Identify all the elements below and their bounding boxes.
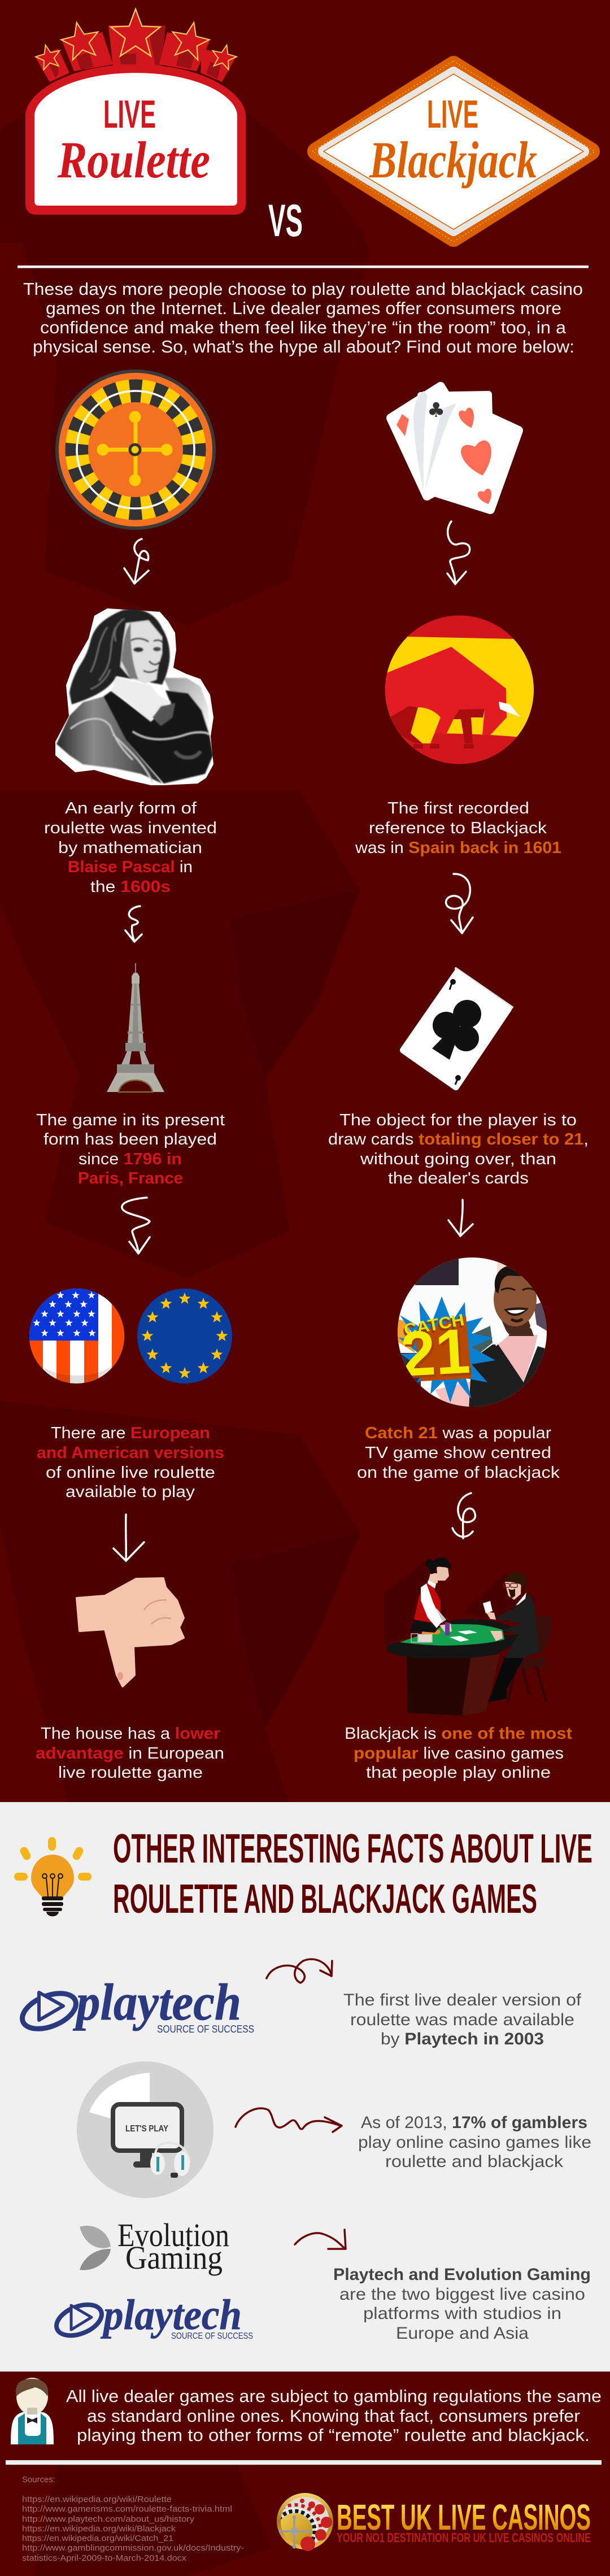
text: early roulette: An early form of xyxy=(65,799,197,817)
text: object of game xyxy=(328,1111,589,1187)
arrow: spain to card xyxy=(446,874,473,933)
text: paris: The game in its present xyxy=(36,1111,225,1129)
text: first reference: The first recorded xyxy=(387,799,529,817)
text: versions: There are European xyxy=(51,1424,210,1442)
text: most popular xyxy=(345,1725,572,1782)
text: paris xyxy=(36,1111,225,1187)
sign stars xyxy=(33,9,239,71)
text: most popular: Blackjack is one of the most xyxy=(345,1725,572,1743)
sources list: http://www.playtech.com/about_us/history xyxy=(22,2514,195,2524)
icon: light bulb xyxy=(14,1837,91,1916)
face xyxy=(494,1272,537,1326)
heading xyxy=(113,1826,592,1922)
intro text: physical sense. So, what’s the hype all about? Find out more below: xyxy=(33,337,574,356)
logo: playtech xyxy=(18,1973,254,2036)
blackjack sign title: LIVE xyxy=(427,92,478,136)
text: regulations xyxy=(66,2386,602,2445)
panel: live blackjack sign: Blackjack xyxy=(369,131,537,189)
arrow: versions to thumb xyxy=(114,1515,144,1561)
text: early roulette: the 1600s xyxy=(90,878,171,896)
icon: gamblers pie and monitor xyxy=(77,2061,213,2198)
logo: playtech second: playtech xyxy=(100,2291,242,2339)
vs label: VS xyxy=(268,195,303,246)
text: biggest platforms: Playtech and Evolution Gaming xyxy=(333,2265,591,2284)
icon: blackjack table xyxy=(384,1557,552,1716)
text: regulations: as standard online ones. Knowing that fact, consumers prefer xyxy=(87,2406,580,2426)
intro text: games on the Internet. Live dealer games offer consumers more xyxy=(46,298,561,318)
left coat xyxy=(56,697,162,784)
photo: catch 21 host: CATCH xyxy=(403,1311,466,1339)
arrow: gamblers fact xyxy=(236,2108,342,2132)
text: playtech 2003: roulette was made available xyxy=(350,2011,574,2029)
logo: playtech second xyxy=(52,2291,253,2342)
sign rays xyxy=(36,25,236,82)
panel: live blackjack sign xyxy=(312,61,595,242)
text: versions: of online live roulette xyxy=(46,1464,215,1482)
text: 17 percent xyxy=(358,2113,591,2171)
sources list: https://en.wikipedia.org/wiki/Roulette xyxy=(22,2495,172,2504)
text: paris: form has been played xyxy=(43,1130,217,1148)
sign title: LIVE xyxy=(103,92,156,136)
text: regulations: playing them to other forms of “remote” roulette and blackjack. xyxy=(77,2425,590,2445)
text: 17 percent: As of 2013, 17% of gamblers xyxy=(361,2113,587,2132)
panel: live roulette sign xyxy=(25,9,246,215)
arrow: platforms fact xyxy=(295,2230,346,2249)
hair xyxy=(69,609,169,704)
text: biggest platforms xyxy=(333,2265,591,2343)
logo: evolution gaming xyxy=(80,2217,229,2276)
icon: club card xyxy=(403,968,512,1087)
text: catch 21: Catch 21 was a popular xyxy=(365,1424,551,1442)
text: object of game: without going over, than xyxy=(360,1150,556,1168)
text: versions: and American versions xyxy=(37,1444,224,1462)
text: biggest platforms: platforms with studios in xyxy=(363,2304,561,2323)
suit jacket xyxy=(472,1326,493,1352)
logo: playtech: SOURCE OF SUCCESS xyxy=(157,2024,254,2035)
logo: playtech: playtech xyxy=(73,1973,241,2031)
text: 17 percent: roulette and blackjack xyxy=(385,2152,564,2171)
dark coat xyxy=(103,690,213,784)
sources list: http://www.gamblingcommission.gov.uk/docs/Industry- xyxy=(22,2543,244,2553)
icon: thumbs down xyxy=(77,1578,184,1686)
sources list: statistics-April-2009-to-March-2014.docx xyxy=(22,2553,187,2563)
text: lower advantage: live roulette game xyxy=(58,1764,203,1782)
collar xyxy=(111,677,171,721)
text: object of game: the dealer's cards xyxy=(388,1169,529,1187)
shirt xyxy=(498,1335,538,1382)
text: paris: since 1796 in xyxy=(79,1150,182,1168)
text: catch 21 xyxy=(357,1424,560,1482)
text: catch 21: on the game of blackjack xyxy=(357,1464,560,1482)
dealer figure xyxy=(411,1557,452,1635)
text: object of game: The object for the player is to xyxy=(339,1111,577,1129)
intro text: These days more people choose to play roulette and blackjack casino xyxy=(23,279,583,299)
sources list: http://www.gamerisms.com/roulette-facts-trivia.html xyxy=(22,2504,232,2514)
text: biggest platforms: Europe and Asia xyxy=(396,2324,529,2343)
text: regulations: All live dealer games are subject to gambling regulations the same xyxy=(66,2386,602,2406)
text: object of game: draw cards totaling closer to 21 , xyxy=(328,1130,589,1148)
logo: best uk live casinos xyxy=(277,2493,591,2551)
text: versions: available to play xyxy=(66,1483,195,1501)
logo: evolution gaming: Gaming xyxy=(125,2239,223,2276)
photo: catch 21 host: 21 xyxy=(402,1318,474,1392)
arrow: paris to flags xyxy=(122,1198,150,1254)
text: biggest platforms: are the two biggest live casino xyxy=(339,2285,585,2304)
text: most popular: that people play online xyxy=(366,1764,551,1782)
text: first reference: reference to Blackjack xyxy=(369,819,547,837)
text: playtech 2003: by Playtech in 2003 xyxy=(381,2030,544,2048)
player figure xyxy=(483,1572,539,1702)
text: first reference: was in Spain back in 1601 xyxy=(355,839,561,857)
text: catch 21: TV game show centred xyxy=(365,1444,551,1462)
text: playtech 2003: The first live dealer version of xyxy=(343,1991,582,2009)
portrait: Blaise Pascal xyxy=(55,608,213,785)
chair xyxy=(507,1615,552,1704)
text: versions xyxy=(37,1424,224,1501)
text: 17 percent: play online casino games like xyxy=(358,2133,591,2152)
text: early roulette: Blaise Pascal in xyxy=(68,858,193,876)
text: early roulette xyxy=(44,799,217,896)
text: paris: Paris, France xyxy=(78,1169,183,1187)
arrow: card to catch 21 xyxy=(448,1200,473,1236)
icon: spanish bull xyxy=(384,615,537,765)
arrow: pascal to eiffel xyxy=(125,906,142,942)
text: most popular: popular live casino games xyxy=(354,1744,564,1763)
face xyxy=(120,620,162,684)
text: lower advantage: The house has a lower xyxy=(41,1725,220,1743)
panel: live roulette sign: Roulette xyxy=(57,131,210,189)
text: lower advantage xyxy=(36,1725,224,1782)
icon: eiffel tower xyxy=(107,963,164,1092)
text: early roulette: by mathematician xyxy=(58,839,202,857)
sources list: Sources: xyxy=(22,2475,55,2484)
sources list: https://en.wikipedia.org/wiki/Blackjack xyxy=(22,2524,176,2534)
icon: playing cards xyxy=(391,386,518,510)
arrow: playtech fact xyxy=(267,1959,332,1983)
logo wheel xyxy=(277,2493,333,2551)
arrow: catch 21 to table xyxy=(452,1493,476,1538)
logo: evolution gaming: Evolution xyxy=(117,2217,229,2253)
icon: gamblers pie and monitor: LET'S PLAY xyxy=(125,2124,168,2134)
icon: playing cards: ♣ xyxy=(427,399,445,422)
sources list xyxy=(22,2475,244,2563)
text: lower advantage: advantage in European xyxy=(36,1744,224,1763)
icon: roulette wheel xyxy=(55,369,216,530)
sources list: https://en.wikipedia.org/wiki/Catch_21 xyxy=(22,2534,173,2543)
icon: american flag xyxy=(29,1288,125,1387)
intro text xyxy=(23,279,583,356)
text: first reference xyxy=(355,799,561,857)
panel: other interesting facts xyxy=(0,1802,610,2372)
intro text: confidence and make them feel like they’re “in the room” too, in a xyxy=(40,317,567,337)
text: early roulette: roulette was invented xyxy=(44,819,217,837)
icon: european flag xyxy=(137,1289,232,1383)
logo: playtech second: SOURCE OF SUCCESS xyxy=(171,2331,253,2341)
photo: catch 21 host: 21 xyxy=(399,1316,472,1390)
photo: catch 21 host: CATCH xyxy=(402,1313,465,1342)
arrow: cards to spain xyxy=(447,521,470,584)
photo: catch 21 host xyxy=(395,1254,551,1409)
text: playtech 2003 xyxy=(343,1991,582,2048)
arrow: wheel to pascal xyxy=(124,539,149,584)
icon: dealer person xyxy=(11,2378,54,2444)
